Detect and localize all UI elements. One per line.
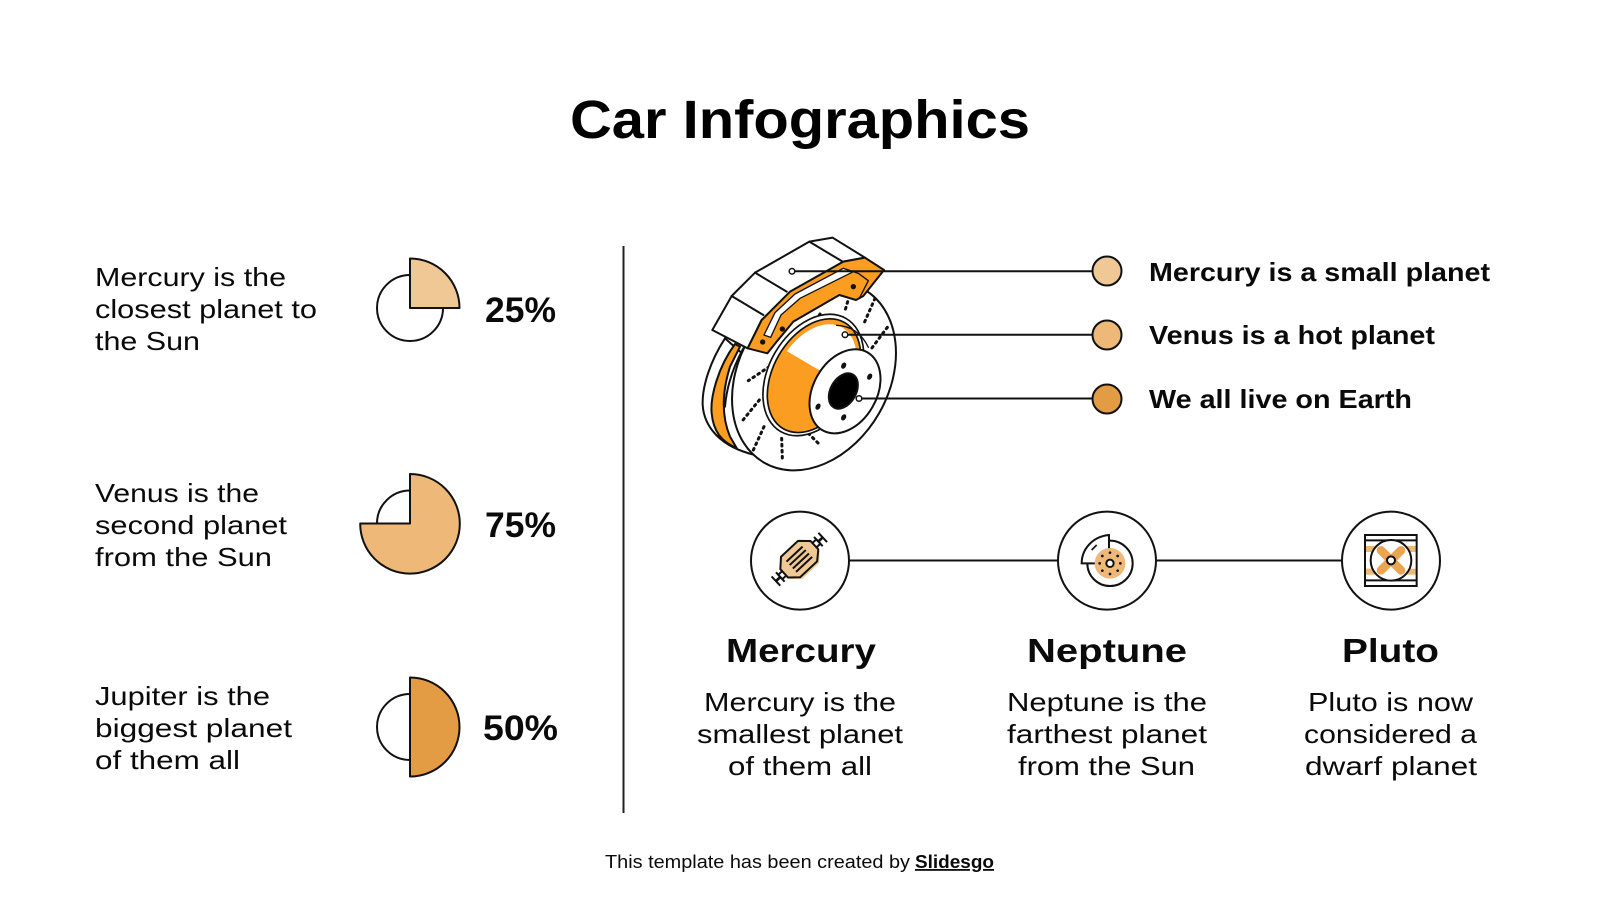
column: Neptune: farthest planet (1007, 719, 1208, 749)
callout: Mercury is a small planet (789, 256, 1490, 287)
column: Mercury: Mercury is the (704, 687, 896, 717)
pie chart: 50% (377, 678, 460, 776)
column: Mercury (697, 632, 904, 781)
text block: Jupiter: of them all (95, 745, 240, 775)
footer credit: Slidesgo (915, 852, 994, 872)
text block: Jupiter: Jupiter is the (95, 681, 270, 711)
caliper (712, 238, 865, 348)
percentage: 25%: 25% (485, 291, 556, 330)
column: Mercury: of them all (728, 751, 872, 781)
icon: radiator fan (1342, 512, 1440, 610)
percentage: 50%: 50% (483, 709, 558, 748)
column: Neptune: Neptune is the (1007, 687, 1207, 717)
column: Neptune (1007, 632, 1208, 781)
icon: brake disc (1058, 512, 1156, 610)
callout: We all live on Earth: We all live on Earth (1149, 384, 1412, 414)
column: Pluto (1304, 632, 1478, 781)
title: Car Infographics (570, 90, 1030, 150)
percentage: 75%: 75% (485, 506, 556, 545)
callout: Venus is a hot planet: Venus is a hot planet (1149, 320, 1435, 350)
callout: Venus is a hot planet (842, 320, 1435, 350)
column: Pluto: Pluto is now (1308, 687, 1473, 717)
column: Pluto: Pluto (1342, 632, 1439, 669)
text block: Mercury: Mercury is the (95, 262, 286, 292)
illustration: brake disc (702, 236, 897, 472)
text block: Jupiter (95, 681, 293, 775)
text block: Jupiter: biggest planet (95, 713, 293, 743)
pie chart: 75% (360, 474, 460, 574)
callout: Mercury is a small planet: Mercury is a small planet (1149, 257, 1490, 287)
text block: Venus: Venus is the (95, 478, 259, 508)
column: Pluto: dwarf planet (1305, 751, 1478, 781)
text block: Mercury (95, 262, 317, 356)
footer credit: This template has been created by (605, 852, 910, 872)
text block: Venus: from the Sun (95, 542, 272, 572)
column: Mercury: smallest planet (697, 719, 904, 749)
callout: We all live on Earth (856, 384, 1412, 414)
pie chart: 25% (377, 258, 460, 341)
column: Neptune: from the Sun (1018, 751, 1195, 781)
column: Mercury: Mercury (726, 632, 877, 669)
drilled holes (742, 298, 887, 458)
column: Pluto: considered a (1304, 719, 1478, 749)
text block: Mercury: the Sun (95, 326, 200, 356)
text block: Mercury: closest planet to (95, 294, 317, 324)
text block: Venus: second planet (95, 510, 288, 540)
icon: catalytic converter (751, 512, 849, 610)
column: Neptune: Neptune (1027, 632, 1187, 669)
text block: Venus (95, 478, 288, 572)
